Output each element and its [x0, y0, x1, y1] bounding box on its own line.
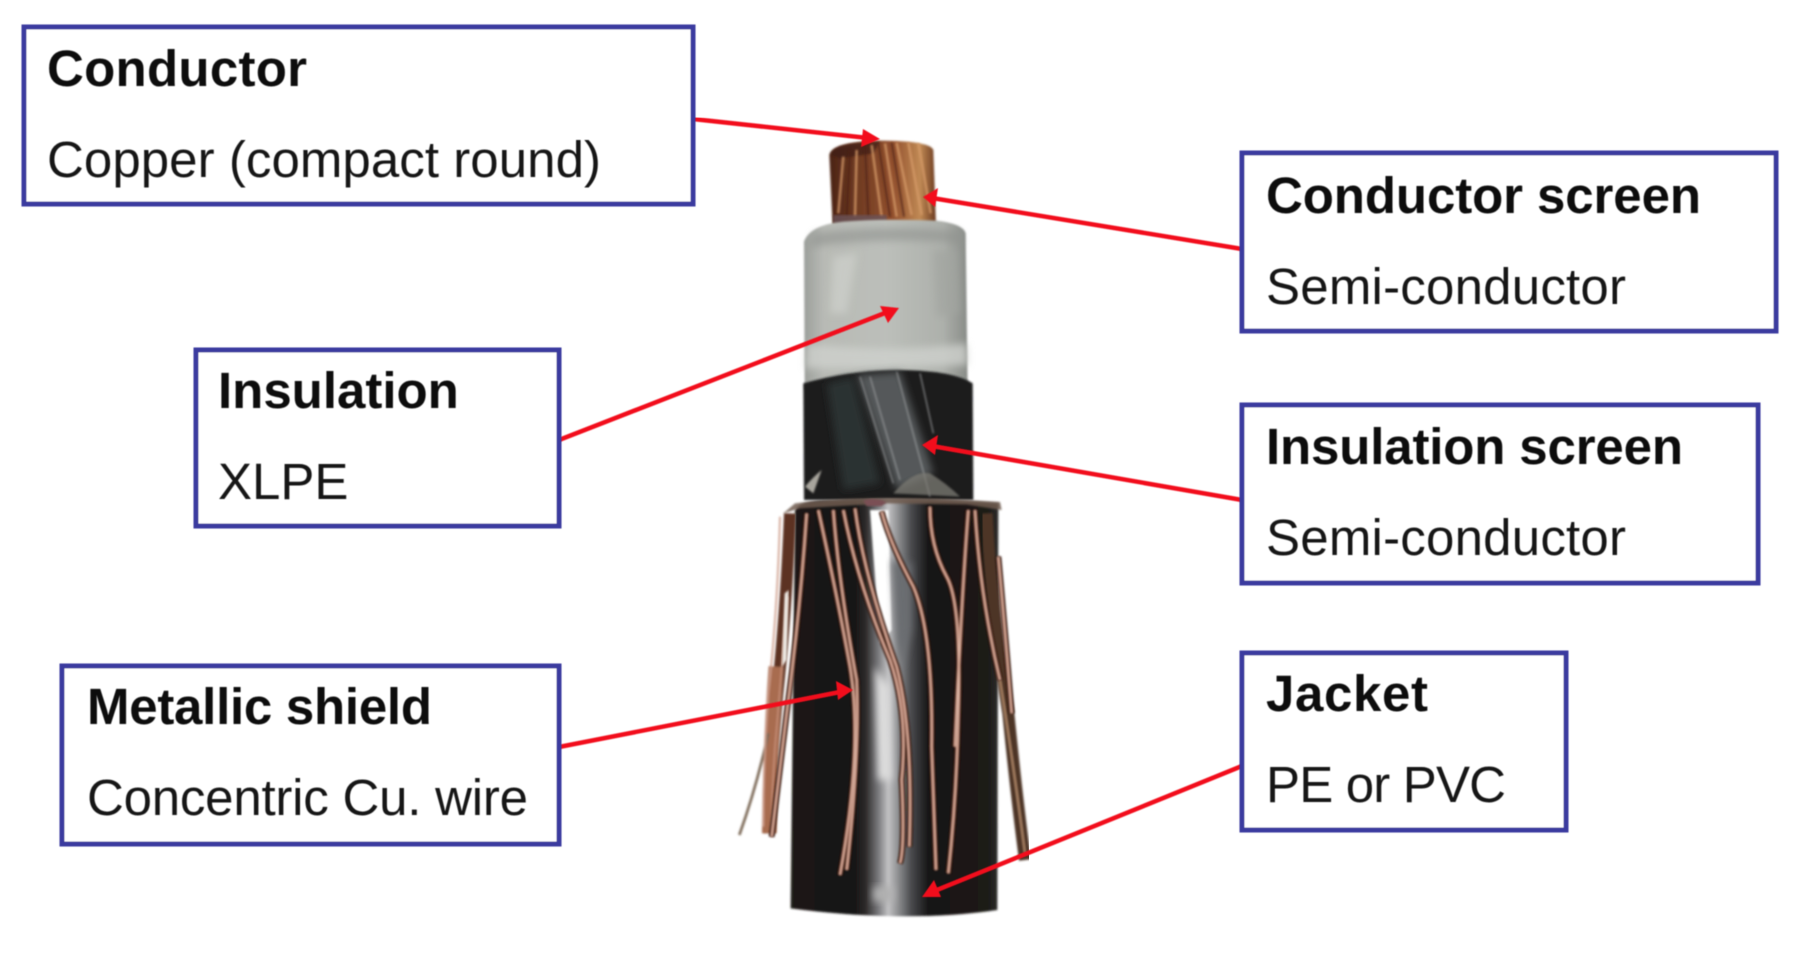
arrow: insulation screen	[922, 435, 1242, 500]
insulation text: Insulation	[218, 362, 459, 419]
jacket text: PE or PVC	[1266, 756, 1506, 813]
conductor screen text	[1266, 167, 1701, 315]
left loose wire bundle	[739, 513, 790, 835]
insulation screen text	[1266, 418, 1683, 566]
jacket text	[1266, 665, 1506, 813]
insulation screen layer	[803, 370, 973, 500]
cable photo	[739, 141, 1025, 916]
metallic shield text: Metallic shield	[87, 678, 432, 735]
conductor screen text: Semi-conductor	[1266, 258, 1626, 315]
panel: insulation	[196, 350, 559, 526]
metallic shield text: Concentric Cu. wire	[87, 769, 528, 826]
right loose wire bundle	[987, 513, 1025, 860]
arrow: insulation	[559, 306, 899, 440]
arrow: jacket	[922, 766, 1242, 897]
arrow: conductor	[693, 119, 880, 147]
conductor text	[47, 40, 601, 188]
conductor screen text: Conductor screen	[1266, 167, 1701, 224]
conductor core	[829, 141, 936, 225]
insulation screen text: Semi-conductor	[1266, 509, 1626, 566]
jacket text: Jacket	[1266, 665, 1428, 722]
arrow: metallic shield	[559, 681, 853, 747]
panel: metallic shield	[62, 666, 559, 844]
jacket with metallic shield wires	[739, 498, 1025, 916]
wrap collar	[783, 498, 1002, 513]
insulation layer	[804, 220, 968, 390]
wire outlines	[772, 507, 1012, 875]
panel: insulation screen	[1242, 405, 1758, 583]
conductor text: Copper (compact round)	[47, 131, 601, 188]
panel: conductor screen	[1242, 153, 1776, 331]
panel: jacket	[1242, 653, 1566, 830]
insulation text: XLPE	[218, 453, 348, 510]
knot strip	[863, 499, 887, 506]
insulation screen text: Insulation screen	[1266, 418, 1683, 475]
panel: conductor	[24, 27, 693, 204]
jacket highlight	[870, 510, 892, 643]
metallic shield text	[87, 678, 528, 826]
conductor text: Conductor	[47, 40, 307, 97]
jacket body	[791, 499, 998, 916]
insulation text	[218, 362, 459, 510]
wire bodies	[772, 507, 1012, 875]
wire highlights	[772, 507, 1012, 875]
white gap in bundle	[782, 590, 789, 667]
arrow: conductor screen	[923, 188, 1242, 249]
